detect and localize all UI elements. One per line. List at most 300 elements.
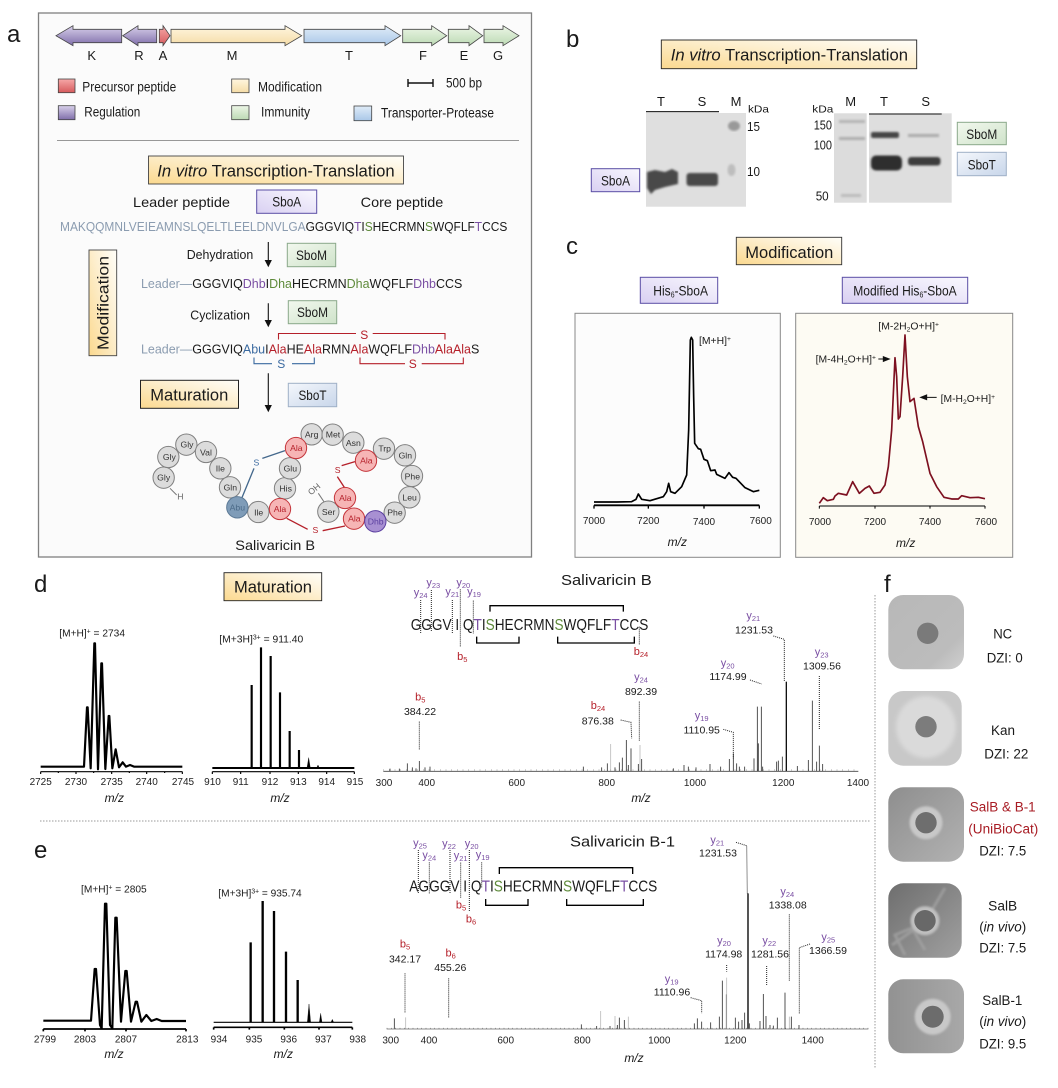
chart: salivaricin B-1 MS/MS spectrum: m/z (624, 1051, 644, 1065)
western blot: SboM and SboT: S (921, 94, 930, 109)
arrow: maturation (266, 373, 271, 411)
mass spectrum: modified His6-SboA: + (991, 394, 995, 401)
legend: Regulation (84, 104, 140, 120)
sequence with fragment map: salivaricin B: 5 (463, 655, 467, 664)
label: SalB-1 in vivo (979, 993, 1026, 1051)
sequence with fragment map: salivaricin B-1: y (413, 838, 419, 850)
SboA box (591, 169, 640, 192)
western blot: SboA: T (657, 94, 665, 109)
structure: salivaricin B residues: Asn (346, 438, 361, 448)
assay plate: SalB and B-1 UniBioCat (888, 787, 964, 862)
cyclized sequence: Leader—GGGVIQAbuIAlaHEAlaRMNAlaWQFLFDhbAlaAlaS (141, 341, 480, 356)
assay plate: NC (888, 595, 964, 669)
chart: salivaricin B-1 MS/MS spectrum (382, 834, 868, 1065)
chart: salivaricin B MS/MS spectrum: y (634, 672, 640, 684)
core peptide label: Core peptide (361, 194, 444, 210)
SboA box: SboA (601, 172, 631, 188)
sequence with fragment map: salivaricin B-1: AGGGV I QTISHECRMNSWQFLFTCCS (409, 879, 657, 896)
chart: salivaricin B-1 MS/MS spectrum: 800 (574, 1035, 591, 1046)
chart: salivaricin B-1 MS/MS spectrum: 22 (768, 939, 776, 948)
gene labels: F (419, 48, 427, 63)
sequence with fragment map: salivaricin B: b (457, 651, 463, 663)
structure: salivaricin B residues: Gly (163, 452, 176, 462)
structure: salivaricin B residues: Phe (387, 508, 403, 518)
sequence with fragment map: salivaricin B-1: 21 (459, 854, 468, 863)
western blot: SboA: 10 (747, 164, 760, 179)
His6-SboA box: -SboA (675, 282, 709, 298)
structure: salivaricin B residues: S (335, 465, 341, 475)
chart: salivaricin B-1 MS/MS spectrum: 300 (382, 1035, 399, 1046)
chart: salivaricin B-1 MS/MS spectrum: 455.26 (434, 962, 467, 974)
chart: salivaricin B-1 charge state: 3+ (251, 889, 259, 896)
label: NC (987, 626, 1023, 665)
structure: salivaricin B residues: His (279, 483, 293, 493)
gene labels: A (159, 48, 168, 63)
chart: salivaricin B MS/MS spectrum: 23 (820, 651, 829, 660)
chart: salivaricin B MS/MS spectrum: 600 (508, 778, 525, 789)
chart: salivaricin B intact mass: 2740 (136, 777, 158, 788)
sequence with fragment map: salivaricin B-1: b (456, 899, 462, 911)
chart: salivaricin B MS/MS spectrum: 400 (418, 778, 435, 789)
sequence with fragment map: salivaricin B: y (445, 586, 451, 598)
modification vertical label: Modification (96, 256, 112, 350)
mass spectrum: modified His6-SboA: O+H] (967, 394, 991, 405)
mass spectrum: His6-SboA: + (727, 336, 731, 343)
chart: salivaricin B MS/MS spectrum: 1000 (684, 778, 707, 789)
chart: salivaricin B-1 charge state: 934 (211, 1034, 228, 1045)
chart: salivaricin B charge state (204, 633, 364, 805)
title: salivaricin B-1: Salivaricin B-1 (570, 834, 675, 851)
chart: salivaricin B MS/MS spectrum: 800 (598, 778, 615, 789)
structure: salivaricin B residues: Ser (322, 507, 336, 517)
sequence with fragment map: salivaricin B: y (426, 577, 432, 589)
title: salivaricin B: Salivaricin B (561, 572, 652, 589)
chart: salivaricin B-1 MS/MS spectrum: b (446, 948, 452, 960)
chart: salivaricin B-1 MS/MS spectrum: 1338.08 (769, 899, 807, 911)
panel letter c: c (566, 233, 578, 260)
chart: salivaricin B-1 MS/MS spectrum: y (780, 886, 786, 898)
SboA box (257, 190, 317, 213)
structure: salivaricin B residues: Phe (405, 471, 420, 481)
sequence with fragment map: salivaricin B: 19 (473, 590, 481, 599)
structure: salivaricin B residues: Gly (157, 473, 171, 483)
sequence with fragment map: salivaricin B-1: 6 (472, 917, 476, 926)
label: SalB-1 in vivo: SalB-1 (982, 993, 1022, 1008)
label: SalB and B-1 UniBioCat: SalB & B-1 (970, 800, 1036, 815)
chart: salivaricin B intact mass: [M+H] (59, 628, 88, 640)
SboA box: SboA (272, 194, 302, 210)
gene labels: K (87, 48, 96, 63)
sequence with fragment map: salivaricin B-1: y (476, 849, 481, 861)
label: SalB-1 in vivo: DZI: 9.5 (979, 1036, 1026, 1051)
chart: salivaricin B charge state: m/z (270, 791, 290, 805)
sequence with fragment map: salivaricin B (411, 577, 648, 664)
panel c heading: modification: Modification (745, 243, 833, 262)
SboM box 1: SboM (296, 247, 327, 263)
chart: salivaricin B-1 charge state: = 935.74 (259, 888, 302, 900)
gene labels: G (493, 48, 503, 63)
mass spectrum: modified His6-SboA: [M-2H (878, 321, 906, 332)
structure: salivaricin B residues: Trp (378, 444, 391, 454)
chart: salivaricin B MS/MS spectrum (376, 610, 870, 805)
western blot: SboA: kDa (748, 104, 769, 116)
chart: salivaricin B MS/MS spectrum: m/z (631, 791, 651, 805)
chart: salivaricin B-1 charge state: m/z (274, 1047, 293, 1061)
label: SalB-1 in vivo: (in vivo) (979, 1014, 1026, 1029)
SboM box 2 (288, 301, 337, 324)
sequence with fragment map: salivaricin B: y (456, 577, 462, 589)
chart: salivaricin B-1 MS/MS spectrum: y (821, 932, 827, 944)
structure: salivaricin B residues: Dhb (368, 516, 384, 526)
His6-SboA box: His (653, 282, 674, 298)
mass spectrum: modified His6-SboA: O+H] (848, 355, 872, 366)
label: SalB and B-1 UniBioCat: (UniBioCat) (968, 821, 1038, 836)
western blot: SboM and SboT (812, 94, 952, 204)
sequence with fragment map: salivaricin B-1 (409, 838, 657, 926)
chart: salivaricin B-1 MS/MS spectrum: 1400 (802, 1035, 824, 1046)
label: SalB in vivo: DZI: 7.5 (979, 940, 1026, 955)
chart: salivaricin B MS/MS spectrum: 1200 (772, 778, 795, 789)
maturation box (140, 380, 238, 408)
mass spectrum: modified His6-SboA: O+H] (910, 321, 935, 332)
chart: salivaricin B MS/MS spectrum: 1110.95 (683, 724, 720, 736)
chart: salivaricin B charge state: 911 (233, 777, 249, 788)
chart: salivaricin B-1 charge state: [M+3H] (218, 888, 252, 900)
sequence with fragment map: salivaricin B: 24 (419, 591, 428, 600)
structure: salivaricin B residues: Ile (216, 463, 225, 473)
mass spectrum: modified His6-SboA: 7200 (864, 517, 887, 528)
chart: salivaricin B MS/MS spectrum: b (591, 700, 597, 712)
SboM box 2: SboM (297, 304, 328, 320)
modified His6-SboA box: Modified His (853, 282, 930, 298)
assay plate: SalB in vivo (888, 883, 962, 958)
structure: salivaricin B residues: Ala (339, 493, 352, 503)
chart: salivaricin B-1 MS/MS spectrum: 19 (670, 977, 679, 986)
label: SalB and B-1 UniBioCat (968, 800, 1038, 859)
structure: salivaricin B residues: S (253, 457, 259, 467)
sequence with fragment map: salivaricin B: 20 (462, 581, 470, 590)
sequence with fragment map: salivaricin B-1: b (466, 913, 472, 925)
chart: salivaricin B-1 MS/MS spectrum: 1200 (724, 1035, 747, 1046)
structure: salivaricin B residues: Leu (402, 492, 417, 502)
mass spectrum: His6-SboA: m/z (668, 535, 687, 549)
chart: salivaricin B intact mass: = 2734 (91, 628, 125, 640)
chart: salivaricin B-1 intact mass: 2799 (34, 1034, 57, 1045)
sequence with fragment map: salivaricin B-1: 5 (462, 903, 466, 912)
western blot: SboM and SboT: 50 (816, 189, 829, 204)
chart: salivaricin B MS/MS spectrum: b (415, 692, 421, 704)
chart: salivaricin B intact mass: 2730 (65, 777, 88, 788)
chart: salivaricin B-1 MS/MS spectrum: 21 (716, 838, 724, 847)
chart: salivaricin B charge state: 910 (204, 777, 221, 788)
chart: salivaricin B MS/MS spectrum: 24 (640, 676, 648, 685)
mass spectrum: modified His6-SboA: 2 (963, 399, 967, 406)
structure: salivaricin B residues: Arg (305, 429, 319, 439)
leader peptide label: Leader peptide (133, 194, 230, 210)
structure: salivaricin B residues: Abu (230, 502, 245, 512)
panel d heading: maturation (224, 573, 322, 601)
chart: salivaricin B-1 MS/MS spectrum: y (762, 935, 768, 947)
chart: salivaricin B MS/MS spectrum: 19 (700, 714, 709, 723)
label: Kan: DZI: 22 (984, 746, 1028, 761)
panel b heading: In vitro Transcription-Translation (671, 46, 908, 64)
chart: salivaricin B-1 MS/MS spectrum: 5 (406, 942, 410, 951)
chart: salivaricin B-1 MS/MS spectrum: 600 (497, 1035, 514, 1046)
sequence with fragment map: salivaricin B-1: y (422, 849, 428, 861)
label: SalB in vivo (979, 899, 1026, 955)
label: SalB in vivo: (in vivo) (979, 920, 1026, 935)
sequence with fragment map: salivaricin B: y (467, 586, 473, 598)
structure: salivaricin B residues (153, 424, 423, 535)
sequence with fragment map: salivaricin B-1: 20 (470, 842, 479, 851)
legend: Transporter-Protease (381, 106, 494, 120)
SboM box 1 (287, 243, 336, 267)
chart: salivaricin B charge state: 914 (318, 777, 335, 788)
chart: salivaricin B charge state: = 911.40 (261, 633, 303, 645)
western blot: SboA (646, 94, 769, 207)
SboT box (957, 152, 1006, 176)
modified His6-SboA box (842, 277, 968, 303)
chart: salivaricin B charge state: 915 (347, 777, 364, 788)
chart: salivaricin B-1 charge state: 935 (246, 1034, 263, 1045)
chart: salivaricin B MS/MS spectrum: 24 (597, 704, 605, 713)
label: Kan: Kan (991, 723, 1015, 738)
sequence with fragment map: salivaricin B-1: y (465, 838, 470, 850)
gene labels: T (345, 48, 353, 63)
chart: salivaricin B-1 MS/MS spectrum: 25 (827, 936, 835, 945)
chart: salivaricin B MS/MS spectrum: y (721, 658, 726, 670)
precursor sequence: MAKQQMNLVEIEAMNSLQELTLEELDNVLGAGGGVIQTISHECRMNSWQFLFTCCS (60, 219, 508, 234)
panel a: biosynthetic pathway (38, 13, 532, 557)
dehydration step: Dehydration (187, 248, 253, 262)
chart: salivaricin B MS/MS spectrum: 21 (752, 614, 760, 623)
chart: salivaricin B-1 MS/MS spectrum: 1281.56 (751, 948, 789, 960)
mass spectrum: modified His6-SboA (796, 313, 1013, 557)
chart: salivaricin B-1 charge state (211, 888, 366, 1061)
structure: salivaricin B residues: Ala (348, 514, 361, 524)
panel letter b: b (566, 26, 579, 53)
structure: salivaricin B residues: Ala (274, 504, 286, 514)
chart: salivaricin B MS/MS spectrum: 1309.56 (803, 660, 841, 672)
chart: salivaricin B MS/MS spectrum: 892.39 (625, 686, 657, 698)
label: NC: NC (993, 626, 1012, 641)
mass spectrum: modified His6-SboA: 7600 (975, 517, 998, 528)
sequence with fragment map: salivaricin B-1: 25 (419, 842, 427, 851)
SboM box (957, 122, 1006, 145)
chart: salivaricin B MS/MS spectrum: y (695, 710, 700, 722)
assay plate: SalB-1 in vivo (888, 979, 964, 1053)
western blot: SboM and SboT: kDa (812, 104, 833, 116)
assay plate: Kan (888, 691, 962, 766)
mass spectrum: modified His6-SboA: 2 (907, 326, 911, 333)
scale bar (408, 76, 482, 90)
chart: salivaricin B-1 MS/MS spectrum: y (717, 935, 723, 947)
SboT box: SboT (968, 156, 996, 172)
western blot: SboA: M (731, 94, 741, 109)
maturation box: Maturation (150, 386, 228, 404)
chart: salivaricin B MS/MS spectrum: 20 (726, 662, 735, 671)
chart: salivaricin B-1 MS/MS spectrum: 24 (786, 890, 794, 899)
panel letter e: e (34, 837, 47, 864)
chart: salivaricin B intact mass: 2745 (172, 777, 195, 788)
chart: salivaricin B charge state: [M+3H] (219, 633, 253, 645)
legend: Precursor peptide (82, 80, 176, 94)
modified His6-SboA box: -SboA (923, 282, 957, 298)
chart: salivaricin B-1 charge state: 937 (315, 1034, 332, 1045)
mass spectrum: His6-SboA: 7400 (693, 517, 716, 528)
mass spectrum: modified His6-SboA: [M-H (941, 394, 962, 405)
chart: salivaricin B-1 intact mass: m/z (104, 1047, 124, 1061)
sequence with fragment map: salivaricin B: 21 (451, 590, 459, 599)
structure: salivaricin B residues: Gln (399, 450, 412, 460)
western blot: SboM and SboT: M (845, 94, 856, 109)
sequence with fragment map: salivaricin B: y (414, 587, 419, 599)
panel b heading (661, 40, 917, 69)
western blot: SboM and SboT: 100 (814, 137, 832, 152)
chart: salivaricin B-1 intact mass: 2813 (176, 1034, 199, 1045)
mass spectrum: His6-SboA (575, 313, 780, 557)
chart: salivaricin B MS/MS spectrum: 876.38 (582, 715, 614, 727)
thioether brackets: S (409, 357, 417, 371)
cyclization step: Cyclization (190, 308, 250, 322)
gene labels: E (460, 48, 469, 63)
chart: salivaricin B MS/MS spectrum: 384.22 (404, 706, 436, 718)
thioether brackets: S (360, 328, 368, 342)
panel letter a: a (7, 21, 21, 48)
sequence with fragment map: salivaricin B: b (634, 646, 640, 658)
thioether brackets: S (277, 357, 285, 371)
gene labels: R (134, 48, 144, 63)
gene cluster arrows (56, 26, 519, 46)
mass spectrum: modified His6-SboA: m/z (896, 536, 915, 550)
sequence with fragment map: salivaricin B-1: y (454, 850, 459, 862)
sequence with fragment map: salivaricin B-1: 24 (428, 853, 436, 862)
panel c heading: modification (736, 237, 842, 265)
chart: salivaricin B intact mass: 2735 (101, 777, 123, 788)
salivaricin B caption: Salivaricin B (235, 537, 315, 553)
chart: salivaricin B-1 MS/MS spectrum: y (665, 973, 670, 985)
western blot: SboA: S (698, 94, 707, 109)
modification vertical label (89, 250, 117, 356)
mass spectrum: His6-SboA: [M+H] (699, 336, 726, 347)
chart: salivaricin B intact mass: 2725 (30, 777, 52, 788)
legend: Immunity (261, 104, 310, 120)
structure: salivaricin B residues: Gln (224, 482, 237, 492)
western blot: SboA: 15 (747, 119, 760, 134)
chart: salivaricin B MS/MS spectrum: 1231.53 (735, 624, 773, 636)
western blot: SboM and SboT: 150 (814, 117, 832, 132)
chart: salivaricin B MS/MS spectrum: y (746, 610, 752, 622)
chart: salivaricin B-1 charge state: 936 (280, 1034, 297, 1045)
chart: salivaricin B-1 MS/MS spectrum: 342.17 (389, 953, 421, 965)
structure: salivaricin B residues: Met (326, 430, 341, 440)
structure: salivaricin B residues: Gly (181, 440, 194, 450)
chart: salivaricin B-1 intact mass: 2803 (74, 1034, 97, 1045)
mass spectrum: modified His6-SboA: + (935, 321, 939, 328)
panel letter f: f (884, 571, 891, 598)
chart: salivaricin B-1 intact mass: + (108, 885, 112, 892)
label: Kan (984, 723, 1028, 761)
structure: salivaricin B residues: OH (306, 481, 322, 497)
chart: salivaricin B-1 MS/MS spectrum: 1000 (648, 1035, 671, 1046)
sequence with fragment map: salivaricin B-1: y (442, 838, 448, 850)
His6-SboA box: 6 (671, 290, 675, 300)
sequence with fragment map: salivaricin B-1: 19 (481, 853, 490, 862)
western blot: SboM and SboT: T (880, 94, 888, 109)
SboM box: SboM (966, 126, 997, 142)
chart: salivaricin B-1 MS/MS spectrum: 6 (452, 952, 456, 961)
sequence with fragment map: salivaricin B-1: 22 (448, 842, 456, 851)
heading: in vitro transcription-translation: In vitro Transcription-Translation (157, 162, 395, 180)
chart: salivaricin B-1 MS/MS spectrum: 1110.96 (654, 987, 690, 999)
SboT box: SboT (298, 387, 327, 403)
chart: salivaricin B-1 intact mass: = 2805 (112, 884, 147, 896)
structure: salivaricin B residues: Ala (290, 443, 303, 453)
structure: salivaricin B residues: S (312, 525, 318, 535)
chart: salivaricin B MS/MS spectrum: y (815, 647, 820, 659)
legend (58, 79, 494, 121)
chart: salivaricin B-1 MS/MS spectrum: 1174.98 (705, 948, 742, 960)
mass spectrum: modified His6-SboA: [M-4H (816, 355, 843, 366)
thioether brackets (254, 328, 463, 371)
mass spectrum: His6-SboA: 7200 (637, 516, 660, 527)
mass spectrum: His6-SboA: 7000 (583, 516, 606, 527)
chart: salivaricin B intact mass: + (87, 629, 91, 636)
sequence with fragment map: salivaricin B: 23 (432, 581, 440, 590)
His6-SboA box (640, 277, 718, 303)
panel letter d: d (34, 571, 47, 598)
chart: salivaricin B-1 MS/MS spectrum: b (400, 938, 406, 950)
structure: salivaricin B residues: Ala (360, 456, 373, 466)
panel d heading: maturation: Maturation (234, 578, 312, 597)
chart: salivaricin B-1 intact mass (34, 884, 199, 1061)
arrow: dehydration (266, 242, 271, 266)
arrow: cyclization (266, 303, 271, 326)
chart: salivaricin B MS/MS spectrum: 5 (421, 696, 425, 705)
mass spectrum: modified His6-SboA: 2 (844, 360, 848, 367)
chart: salivaricin B-1 MS/MS spectrum: 1231.53 (699, 848, 737, 860)
sequence with fragment map: salivaricin B: 24 (640, 650, 648, 659)
mass spectrum: modified His6-SboA: + (872, 355, 876, 362)
mass spectrum: modified His6-SboA: 7000 (809, 517, 832, 528)
modified His6-SboA box: 6 (919, 290, 924, 300)
label: SalB and B-1 UniBioCat: DZI: 7.5 (979, 844, 1026, 859)
mass spectrum: modified His6-SboA: 7400 (919, 517, 942, 528)
chart: salivaricin B MS/MS spectrum: 1174.99 (709, 671, 747, 683)
gene labels: M (227, 48, 237, 63)
structure: salivaricin B residues: Glu (284, 464, 297, 474)
chart: salivaricin B charge state: 3+ (253, 634, 261, 641)
chart: salivaricin B-1 MS/MS spectrum: y (710, 834, 716, 846)
chart: salivaricin B-1 charge state: 938 (349, 1034, 366, 1045)
chart: salivaricin B-1 MS/MS spectrum: 400 (421, 1035, 438, 1046)
gene labels (87, 48, 503, 63)
sequence with fragment map: salivaricin B: GGGV I QTISHECRMNSWQFLFTCCS (411, 617, 648, 634)
label: NC: DZI: 0 (987, 650, 1023, 665)
label: SalB in vivo: SalB (988, 899, 1017, 914)
chart: salivaricin B MS/MS spectrum: 300 (376, 778, 393, 789)
chart: salivaricin B charge state: 913 (290, 777, 307, 788)
legend: Modification (258, 80, 322, 94)
scale bar: 500 bp (446, 76, 482, 90)
chart: salivaricin B MS/MS spectrum: 1400 (847, 778, 870, 789)
structure: salivaricin B residues: Ile (254, 507, 263, 517)
chart: salivaricin B-1 MS/MS spectrum: 20 (723, 939, 731, 948)
SboT box (288, 383, 337, 407)
chart: salivaricin B-1 intact mass: [M+H] (81, 884, 109, 896)
dehydrated sequence: Leader—GGGVIQDhbIDhaHECRMNDhaWQFLFDhbCCS (141, 276, 463, 291)
chart: salivaricin B-1 MS/MS spectrum: 1366.59 (809, 945, 847, 957)
